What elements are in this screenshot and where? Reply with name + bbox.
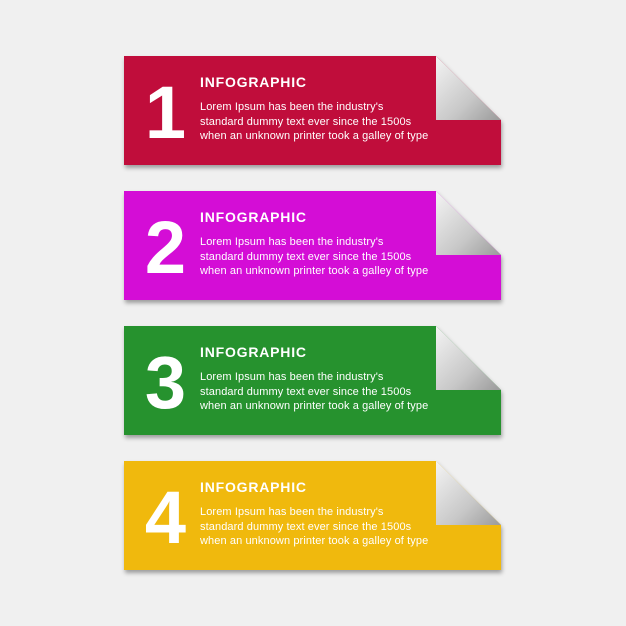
title 1: INFOGRAPHIC (200, 74, 307, 90)
body 1: Lorem Ipsum has been the industry's (200, 101, 384, 113)
title 2: INFOGRAPHIC (200, 209, 307, 225)
panel 1 (122, 56, 504, 170)
body 3: standard dummy text ever since the 1500s (200, 386, 411, 398)
body 1: when an unknown printer took a galley of type (200, 130, 428, 142)
panel 4 (122, 461, 504, 576)
body 3 (200, 371, 428, 412)
body 3: when an unknown printer took a galley of type (200, 400, 428, 412)
body 2 (200, 236, 428, 277)
number 3: 3 (145, 341, 186, 424)
body 1: standard dummy text ever since the 1500s (200, 116, 411, 128)
body 4: when an unknown printer took a galley of type (200, 535, 428, 547)
number 4: 4 (145, 476, 186, 559)
title 3: INFOGRAPHIC (200, 344, 307, 360)
body 1 (200, 101, 428, 142)
title 4: INFOGRAPHIC (200, 479, 307, 495)
panel 2 (122, 191, 504, 306)
body 2: standard dummy text ever since the 1500s (200, 251, 411, 263)
number 1: 1 (145, 71, 186, 154)
body 4: standard dummy text ever since the 1500s (200, 521, 411, 533)
number 2: 2 (145, 206, 186, 289)
panel 3 (122, 326, 504, 440)
body 3: Lorem Ipsum has been the industry's (200, 371, 384, 383)
body 4: Lorem Ipsum has been the industry's (200, 506, 384, 518)
body 2: when an unknown printer took a galley of type (200, 265, 428, 277)
body 2: Lorem Ipsum has been the industry's (200, 236, 384, 248)
body 4 (200, 506, 428, 547)
